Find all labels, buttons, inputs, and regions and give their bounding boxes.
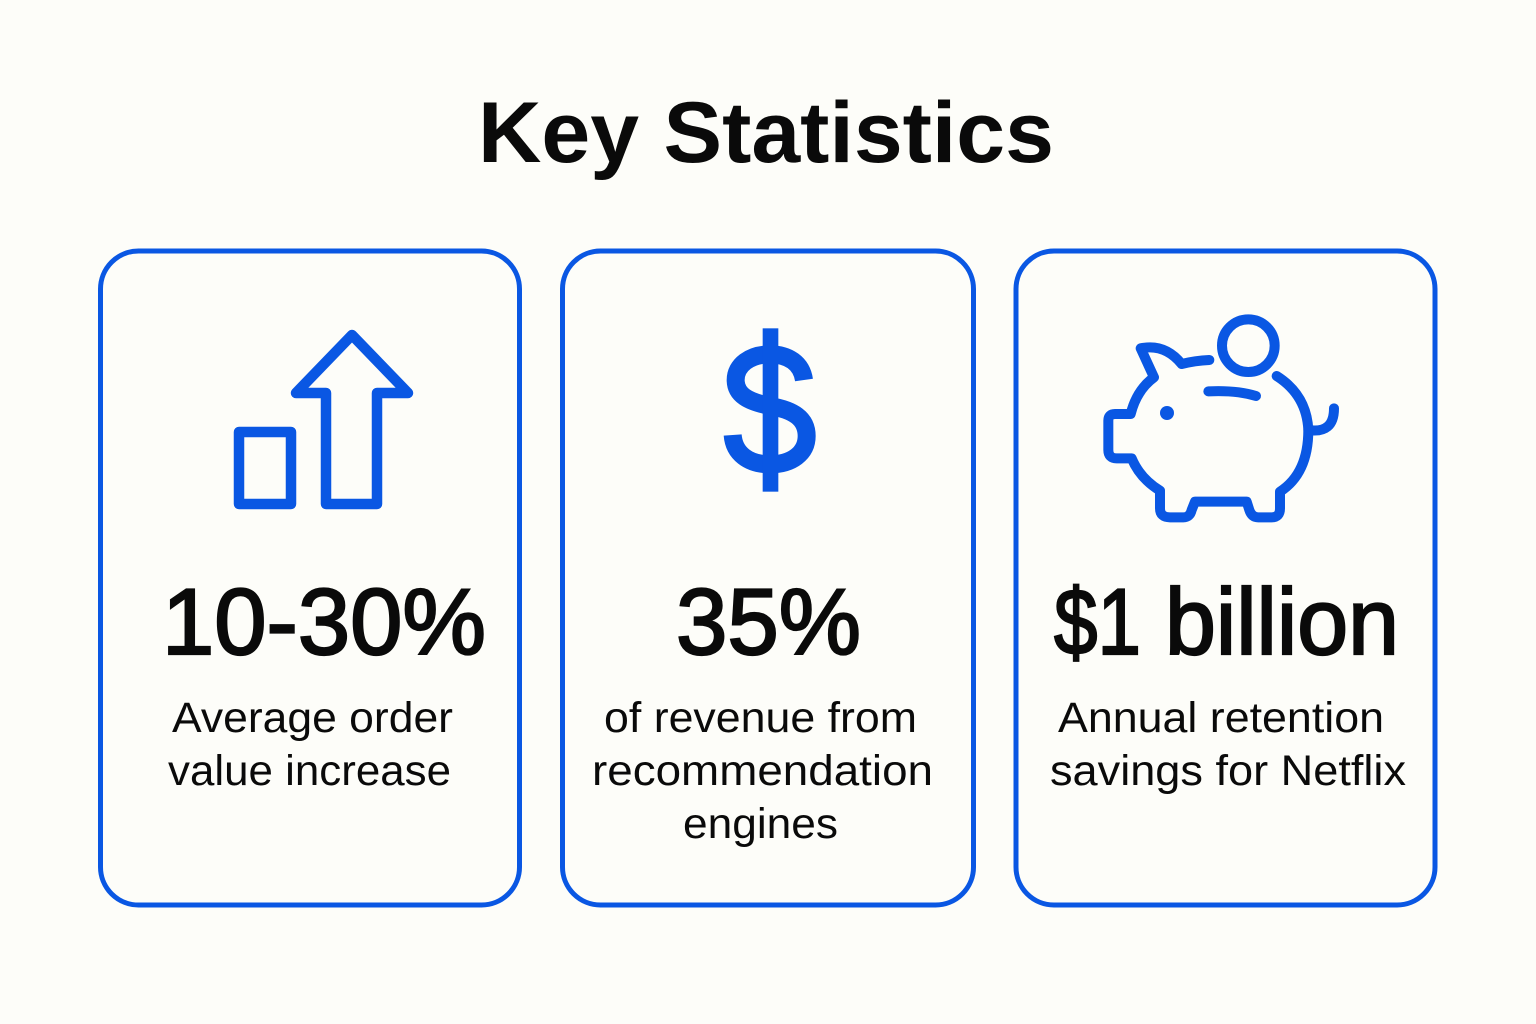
icon: bar and up arrow (239, 335, 408, 504)
icon: piggy bank with coin (1108, 319, 1334, 517)
description: revenue from recommendation engines: recommendation (592, 747, 933, 795)
card outline: average order value (100, 251, 520, 905)
description: average order value increase: value increase (168, 747, 451, 795)
statistic: 35%: 35% (676, 569, 861, 674)
panel: annual retention savings (1016, 251, 1435, 905)
description: annual retention savings for Netflix: savings for Netflix (1050, 747, 1407, 795)
title: Key Statistics (478, 85, 1054, 181)
description: annual retention savings for Netflix (1050, 694, 1407, 795)
statistic: $1 billion (1054, 569, 1399, 674)
description: revenue from recommendation engines (592, 694, 933, 848)
description: average order value increase: Average order (172, 694, 453, 742)
description: revenue from recommendation engines: engines (683, 800, 838, 848)
panel: revenue from recommendation engines (562, 251, 974, 905)
statistic: $1 billion: $1 (1054, 569, 1141, 674)
panel: average order value (100, 251, 520, 905)
description: revenue from recommendation engines: of revenue from (604, 694, 917, 742)
card outline: retention savings (1016, 251, 1435, 905)
description: average order value increase (168, 694, 453, 795)
card outline: revenue (562, 251, 974, 905)
icon: dollar sign (733, 328, 807, 492)
description: annual retention savings for Netflix: Annual retention (1058, 694, 1384, 742)
statistic: $1 billion: billion (1165, 569, 1399, 674)
statistic: 10-30%: 10-30% (162, 569, 486, 674)
